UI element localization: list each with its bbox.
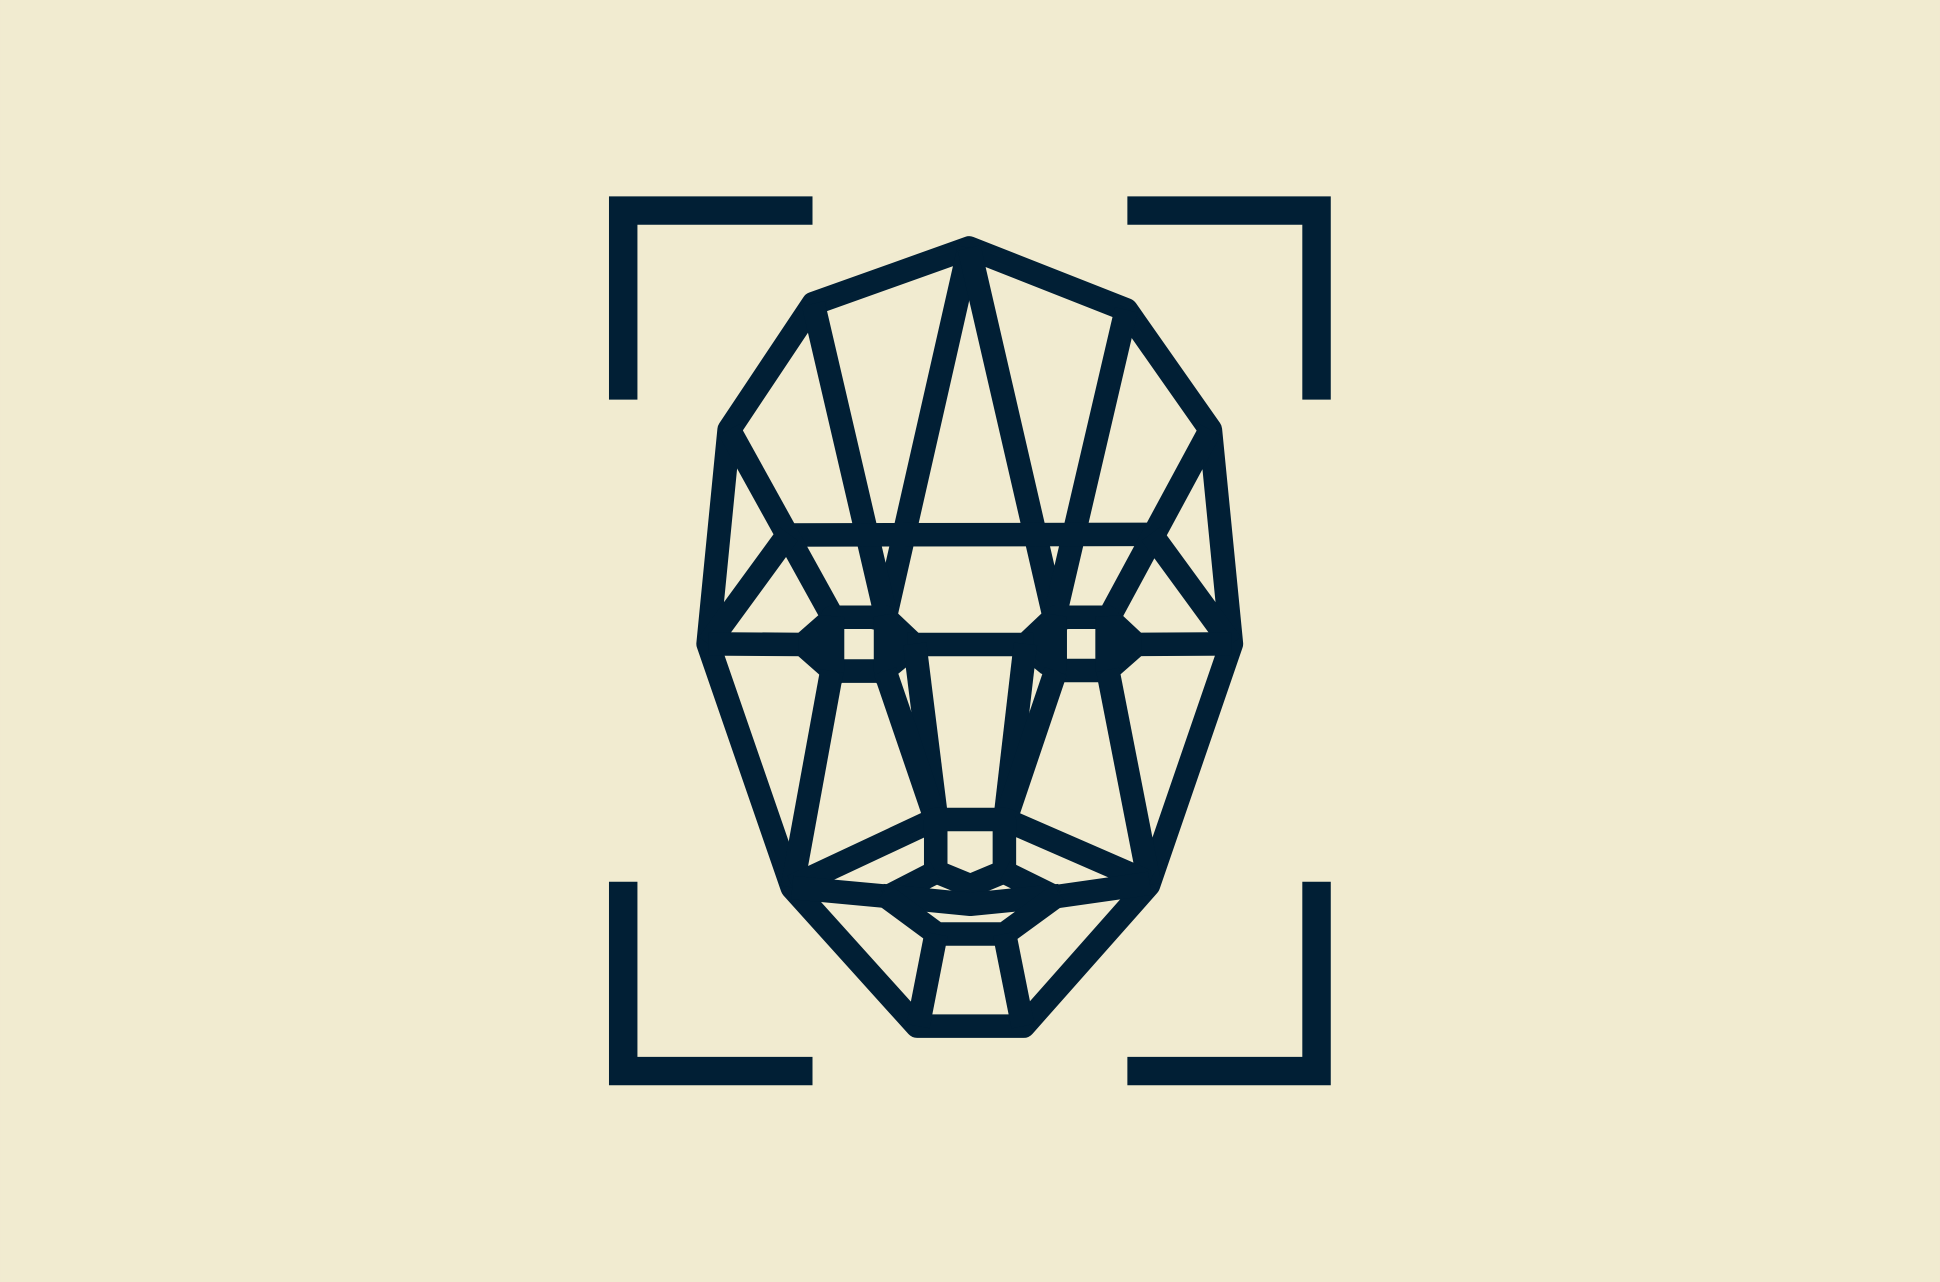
- bracket: top left: [609, 196, 813, 400]
- mouth: [792, 872, 1150, 934]
- cheek and temple lines: [708, 430, 1231, 644]
- bracket: top right: [1127, 196, 1331, 400]
- brow line: [781, 525, 1158, 544]
- icon: face wireframe mesh: [708, 248, 1231, 1026]
- nose tip: [936, 820, 1004, 886]
- lower face lines: [792, 670, 1150, 888]
- chin lines: [918, 934, 1023, 1026]
- left eye: [798, 613, 918, 683]
- bracket: bottom right: [1127, 882, 1331, 1085]
- scan frame: corner brackets: [609, 196, 1331, 1085]
- forehead lines: [813, 248, 1126, 644]
- face outline: [708, 248, 1231, 1026]
- right eye: [1021, 613, 1141, 682]
- nose bridge: [907, 644, 1033, 820]
- bracket: bottom left: [609, 882, 813, 1085]
